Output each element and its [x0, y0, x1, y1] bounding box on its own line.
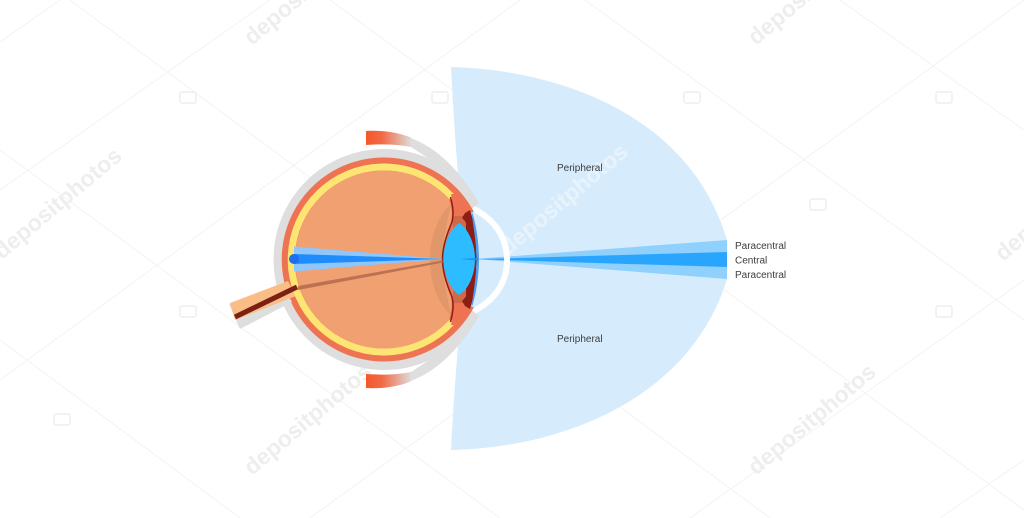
- paracentral beam in eye: [294, 246, 444, 272]
- label: Peripheral top: Peripheral: [557, 163, 603, 174]
- visual field: peripheral area: [451, 67, 727, 450]
- optic nerve sheath: [229, 284, 292, 329]
- vitreous body: [295, 170, 452, 348]
- paracentral beam: [474, 240, 727, 279]
- label: Peripheral bottom: Peripheral: [557, 334, 603, 345]
- retina: [291, 167, 451, 352]
- label: Paracentral top: Paracentral: [735, 241, 786, 252]
- muscle tendon bottom: [410, 309, 479, 381]
- nerve fibre line: [298, 260, 443, 290]
- dark ciliary edge: [442, 197, 453, 322]
- zonules top: [453, 216, 467, 228]
- zonules bottom: [453, 291, 467, 303]
- ciliary body bottom: [451, 302, 470, 325]
- eye muscle top: [366, 131, 412, 147]
- eye muscle bottom: [366, 372, 412, 388]
- label: Paracentral bottom: Paracentral: [735, 270, 786, 281]
- iris bottom: [462, 269, 476, 309]
- central beam in eye: [294, 254, 444, 264]
- central beam through lens: [460, 258, 478, 260]
- cornea arc: [472, 208, 507, 312]
- label: Central: Central: [735, 256, 767, 266]
- ciliary shade: [430, 204, 451, 315]
- watermark camera icons: [54, 92, 952, 425]
- watermark over field: depositphotos: [495, 138, 633, 260]
- watermark text: depositphotos: [743, 358, 881, 480]
- ciliary body top: [451, 194, 470, 217]
- watermark text: depositphotos: [239, 358, 377, 480]
- fovea: [289, 254, 299, 264]
- central beam: [474, 252, 727, 267]
- eye: [229, 131, 507, 388]
- lens: [444, 223, 475, 295]
- central retinal vessel: [235, 287, 297, 317]
- iris backing: [466, 214, 476, 305]
- muscle tendon top: [410, 138, 479, 210]
- choroid: [282, 158, 474, 362]
- iris top: [462, 210, 476, 250]
- sclera: [274, 149, 479, 370]
- optic nerve: [230, 281, 296, 320]
- cornea blue crescent: [471, 209, 479, 310]
